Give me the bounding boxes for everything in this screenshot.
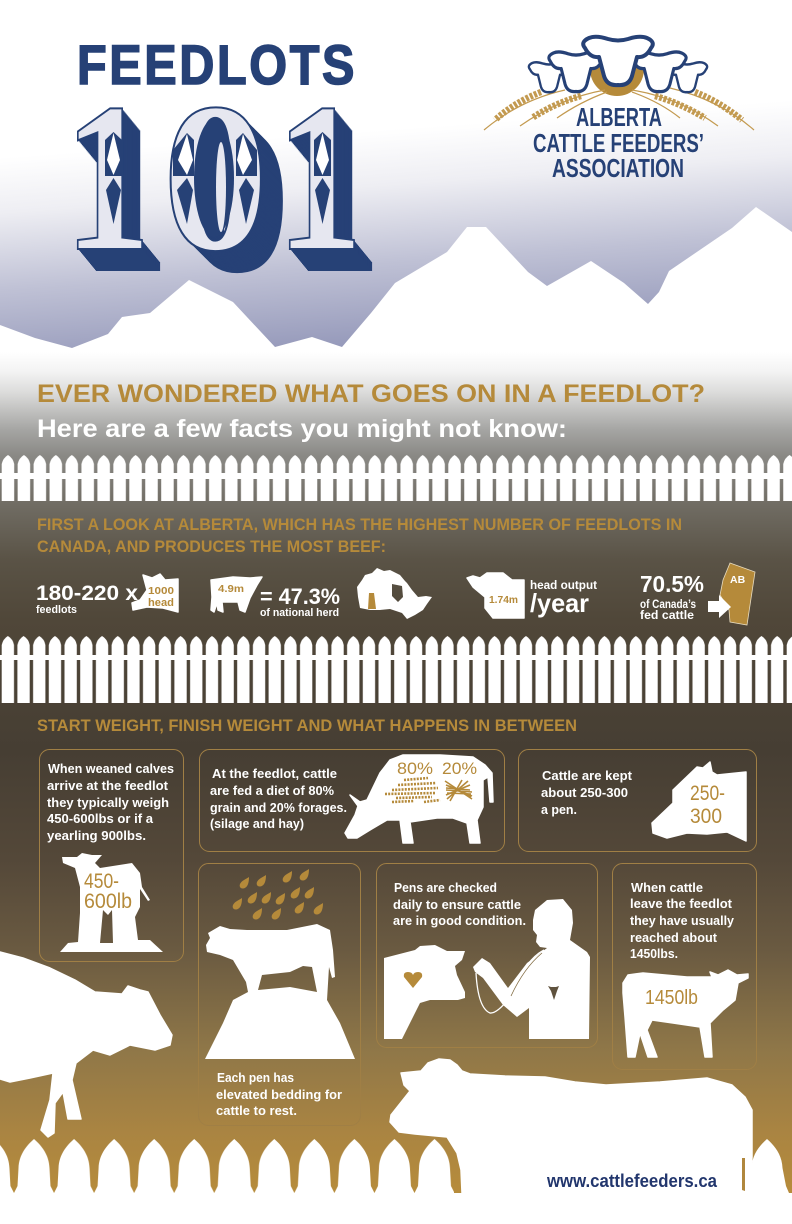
stat: head output per year: head output [530,578,597,592]
panel: diet: 20% [442,759,477,778]
panel: cattle per pen: a pen. [541,803,577,817]
logo cow heads [529,37,707,92]
panel: weaned calves: 600lb [84,890,132,913]
panel: cattle per pen [518,750,756,852]
logo wordmark: CATTLE FEEDERS’ [533,128,704,158]
panel: finish weight: 1450lb [645,987,698,1009]
stat: feedlots x 1000 head: head [148,597,174,609]
icon: hay [445,780,472,801]
panel: weaned calves: arrive at the feedlot [47,779,169,793]
stat: head output per year [467,573,597,618]
stat: head output per year: /year [530,588,589,618]
bottom fence [0,1139,792,1224]
Alberta heading [37,515,682,556]
icon: cow body [132,574,178,612]
icon: rain drops [233,869,323,920]
stat: feedlots x 1000 head: 1000 [148,585,174,597]
panel: diet: are fed a diet of 80% [210,784,334,798]
icon: cow head and body [467,573,524,618]
icon: cow head [652,762,746,841]
title: FEEDLOTS [77,33,357,96]
stat: share of fed cattle: AB [730,574,746,586]
big numeral 101: 1 [276,60,365,296]
cow silhouette: bottom right [390,1059,752,1193]
panel: pen checks: are in good condition. [393,914,526,928]
heading: Here are a few facts you might not know: [37,415,567,443]
panel: weaned calves: When weaned calves [48,762,174,776]
panel: cattle per pen: about 250-300 [541,786,628,800]
panel: finish weight: reached about [630,931,718,945]
panel: finish weight: leave the feedlot [630,897,733,911]
icon: Alberta map [720,563,755,625]
big numeral 101 [64,60,372,296]
stat: feedlots x 1000 head [36,574,178,616]
icon: grazing cow [345,755,493,843]
panel: weaned calves: they typically weigh [47,796,169,810]
panel: diet [200,750,504,852]
stat: national herd: 4.9m [218,584,244,595]
heading: EVER WONDERED WHAT GOES ON IN A FEEDLOT? [37,380,705,408]
big numeral 101: 1 [64,60,153,296]
panel: elevated bedding: elevated bedding for [216,1088,342,1102]
stat: share of fed cattle: fed cattle [640,610,694,622]
gradient background [0,352,792,1195]
logo wordmark [533,102,704,183]
panel: elevated bedding [198,864,360,1126]
icon: finished steer [623,970,748,1057]
stat: share of fed cattle [640,563,755,625]
panel: finish weight: When cattle [631,881,703,895]
icon: map of Canada [357,568,432,619]
stat: share of fed cattle: 70.5% [640,571,704,597]
website: www.cattlefeeders.ca [546,1171,718,1191]
brown sliver beside the tail [742,1158,745,1191]
stat: feedlots x 1000 head: feedlots [36,604,77,616]
icon: grain [385,778,440,802]
panel: diet: 80% [397,759,433,778]
panel: finish weight: 1450lbs. [630,947,678,961]
panel: pen checks [376,864,598,1048]
panel: weaned calves: 450- [84,870,119,893]
logo: Alberta Cattle Feeders' Association [484,37,754,183]
icon: heart [404,972,422,988]
icon: stethoscope [476,950,544,1013]
panel: diet: (silage and hay) [210,817,304,831]
stat: national herd [211,577,340,619]
section heading: START WEIGHT, FINISH WEIGHT AND WHAT HAPPENS IN BETWEEN [37,717,577,735]
icon: cow head [384,945,465,1039]
stat: head output per year: 1.74m [489,595,518,606]
panel: weaned calves: 450-600lbs or if a [47,812,154,826]
fence 1 [0,455,792,501]
panel: diet: grain and 20% forages. [210,801,347,815]
icon: standing cow [211,577,262,612]
numeral ornaments [105,119,331,237]
panel: pen checks: Pens are checked [394,881,497,895]
big numeral 101: 0 [162,60,271,296]
logo wheat [484,88,754,130]
cow silhouette: bottom left [0,952,172,1137]
logo wordmark: ALBERTA [576,102,662,132]
panel: elevated bedding: Each pen has [217,1071,294,1085]
arrow [708,595,731,618]
panel: finish weight: they have usually [630,914,734,928]
panel: cattle per pen: 300 [690,805,722,828]
icon: small cow head [548,986,559,1000]
fence 2 [0,636,792,703]
panel: weaned calves [40,750,184,962]
icon: calf [60,853,163,952]
panel: finish weight [612,864,756,1070]
Alberta heading: FIRST A LOOK AT ALBERTA, WHICH HAS THE HIGHEST NUMBER OF FEEDLOTS IN [37,515,682,534]
stat: national herd: of national herd [260,607,339,619]
Alberta heading: CANADA, AND PRODUCES THE MOST BEEF: [37,537,386,556]
stat: feedlots x 1000 head: 180-220 x [36,582,138,605]
panel: weaned calves: yearling 900lbs. [47,829,146,843]
panel: cattle per pen: 250- [690,782,725,805]
icon: cow on mound [205,924,355,1059]
heading [37,380,705,443]
panel: elevated bedding: cattle to rest. [216,1104,297,1118]
panel: diet: At the feedlot, cattle [212,767,337,781]
panel: pen checks: daily to ensure cattle [393,898,521,912]
panel: cattle per pen: Cattle are kept [542,769,633,783]
icon: veterinarian [473,899,590,1039]
stat: national herd: = 47.3% [260,584,340,609]
logo wordmark: ASSOCIATION [552,153,684,183]
stat: share of fed cattle: of Canada’s [640,599,696,611]
logo gold sun [590,42,644,96]
